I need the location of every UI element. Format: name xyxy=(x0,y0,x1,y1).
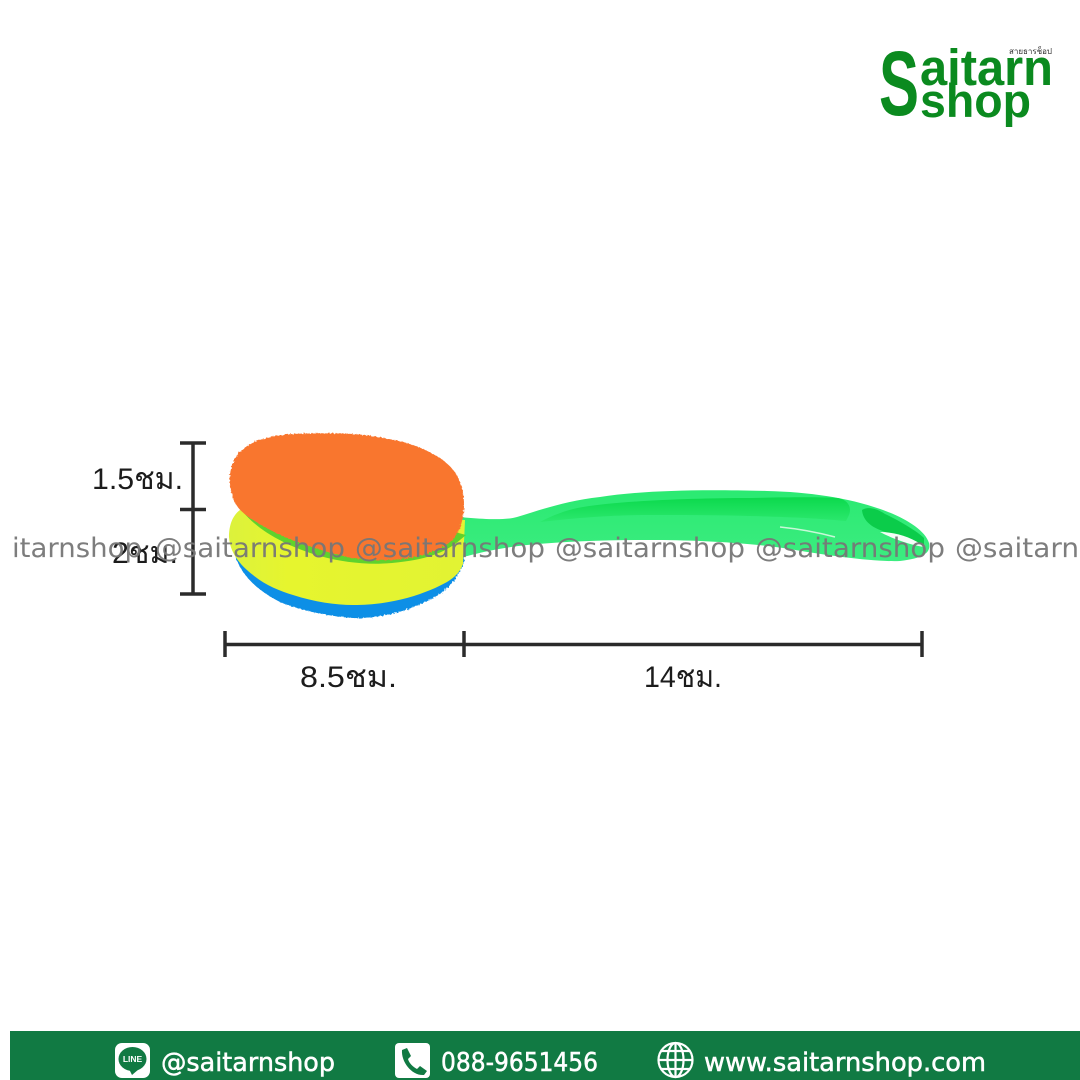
logo Thai tagline: สายธารช็อป xyxy=(1009,46,1052,56)
label: 14 cm: 14ชม. xyxy=(644,661,722,694)
watermark row xyxy=(12,533,1079,564)
yellow sponge layer xyxy=(229,510,465,605)
logo: Saitarn shop xyxy=(879,33,1053,135)
icon: globe xyxy=(658,1043,692,1077)
brush handle xyxy=(445,490,929,562)
dimension: height lines xyxy=(180,443,206,594)
text: phone number: 088-9651456 xyxy=(441,1048,598,1078)
icon: phone xyxy=(395,1043,430,1078)
watermark row: @saitarnshop xyxy=(755,533,945,564)
logo word: aitarn: aitarn xyxy=(920,39,1053,96)
product: sponge brush xyxy=(229,433,929,618)
green fibre layer xyxy=(243,510,466,564)
label: 1.5 cm: 1.5ชม. xyxy=(92,463,183,496)
text: website: www.saitarnshop.com xyxy=(704,1048,986,1078)
watermark row: @saitarnshop xyxy=(155,533,345,564)
label: 8.5 cm: 8.5ชม. xyxy=(300,661,397,694)
watermark row: @saitarnshop xyxy=(355,533,545,564)
orange scouring pad xyxy=(230,433,464,560)
icon: LINE: LINE xyxy=(123,1054,143,1064)
dimension: width lines xyxy=(225,631,922,657)
blue sponge layer xyxy=(235,545,464,618)
logo big S: S xyxy=(879,33,919,135)
icon: LINE xyxy=(115,1043,150,1078)
watermark row: @saitarn xyxy=(955,533,1079,564)
label: 2 cm: 2ชม. xyxy=(112,537,178,570)
text: LINE handle: @saitarnshop xyxy=(161,1048,335,1078)
logo word: shop: shop xyxy=(920,74,1031,127)
watermark row: @saitarnshop xyxy=(555,533,745,564)
footer bar xyxy=(10,1031,1080,1080)
watermark row: itarnshop xyxy=(12,533,142,564)
